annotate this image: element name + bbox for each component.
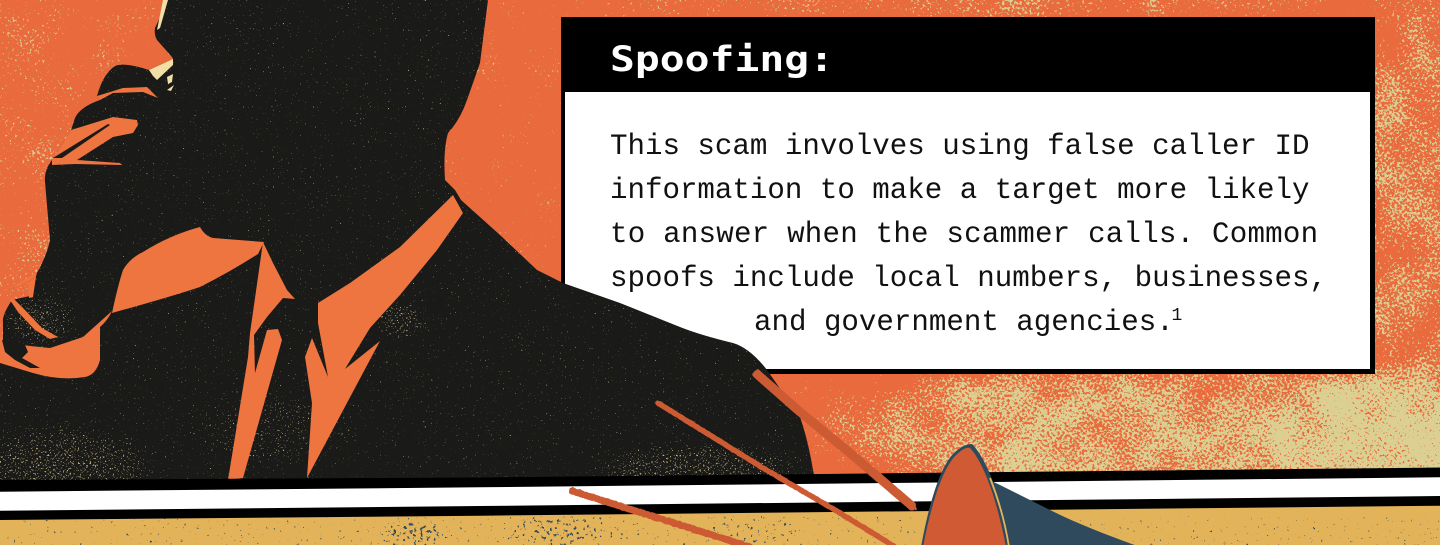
bell rim <box>921 444 1012 545</box>
rim highlight <box>990 478 1009 545</box>
bottom stripes <box>0 468 1440 545</box>
gap between fingers <box>97 87 158 100</box>
chin highlight <box>167 74 174 91</box>
streak one <box>757 374 912 506</box>
cuff swirl <box>2 340 40 368</box>
speckle on silhouette <box>0 0 830 520</box>
white stripe <box>0 477 1440 511</box>
card frame and heading bar <box>561 17 1375 374</box>
illustration: silhouette of man on phone <box>0 0 830 520</box>
cuff band <box>10 297 58 339</box>
icon: megaphone <box>921 444 1140 545</box>
streak three <box>572 491 750 545</box>
yellow band <box>0 504 1440 545</box>
bell face <box>923 448 1006 545</box>
panel: spoofing definition card <box>561 17 1375 374</box>
card body <box>565 92 1370 369</box>
red hand-drawn streaks <box>572 374 912 545</box>
body text: information to make a target more likely <box>610 174 1310 207</box>
heading: Spoofing: <box>610 40 834 80</box>
finger line <box>53 124 110 158</box>
shirt cuff <box>0 311 112 378</box>
streak two <box>658 403 897 545</box>
finger gaps <box>52 117 138 165</box>
black stripe <box>0 468 1440 520</box>
cigarette highlight <box>149 59 173 80</box>
silhouette <box>0 0 815 482</box>
left collar and shirt strip <box>228 242 295 480</box>
navy speckle on yellow band <box>0 512 1440 545</box>
body text: to answer when the scammer calls. Common <box>610 218 1318 251</box>
arm gap <box>112 227 264 313</box>
body text: and government agencies. <box>754 306 1174 339</box>
body text: spoofs include local numbers, businesses, <box>610 262 1327 295</box>
right collar and shirt strip <box>305 195 463 478</box>
body text: This scam involves using false caller ID <box>610 130 1310 163</box>
cone <box>985 478 1140 545</box>
glasses highlight <box>157 0 168 30</box>
footnote marker: 1 <box>1172 306 1182 326</box>
wrist line <box>15 273 36 298</box>
